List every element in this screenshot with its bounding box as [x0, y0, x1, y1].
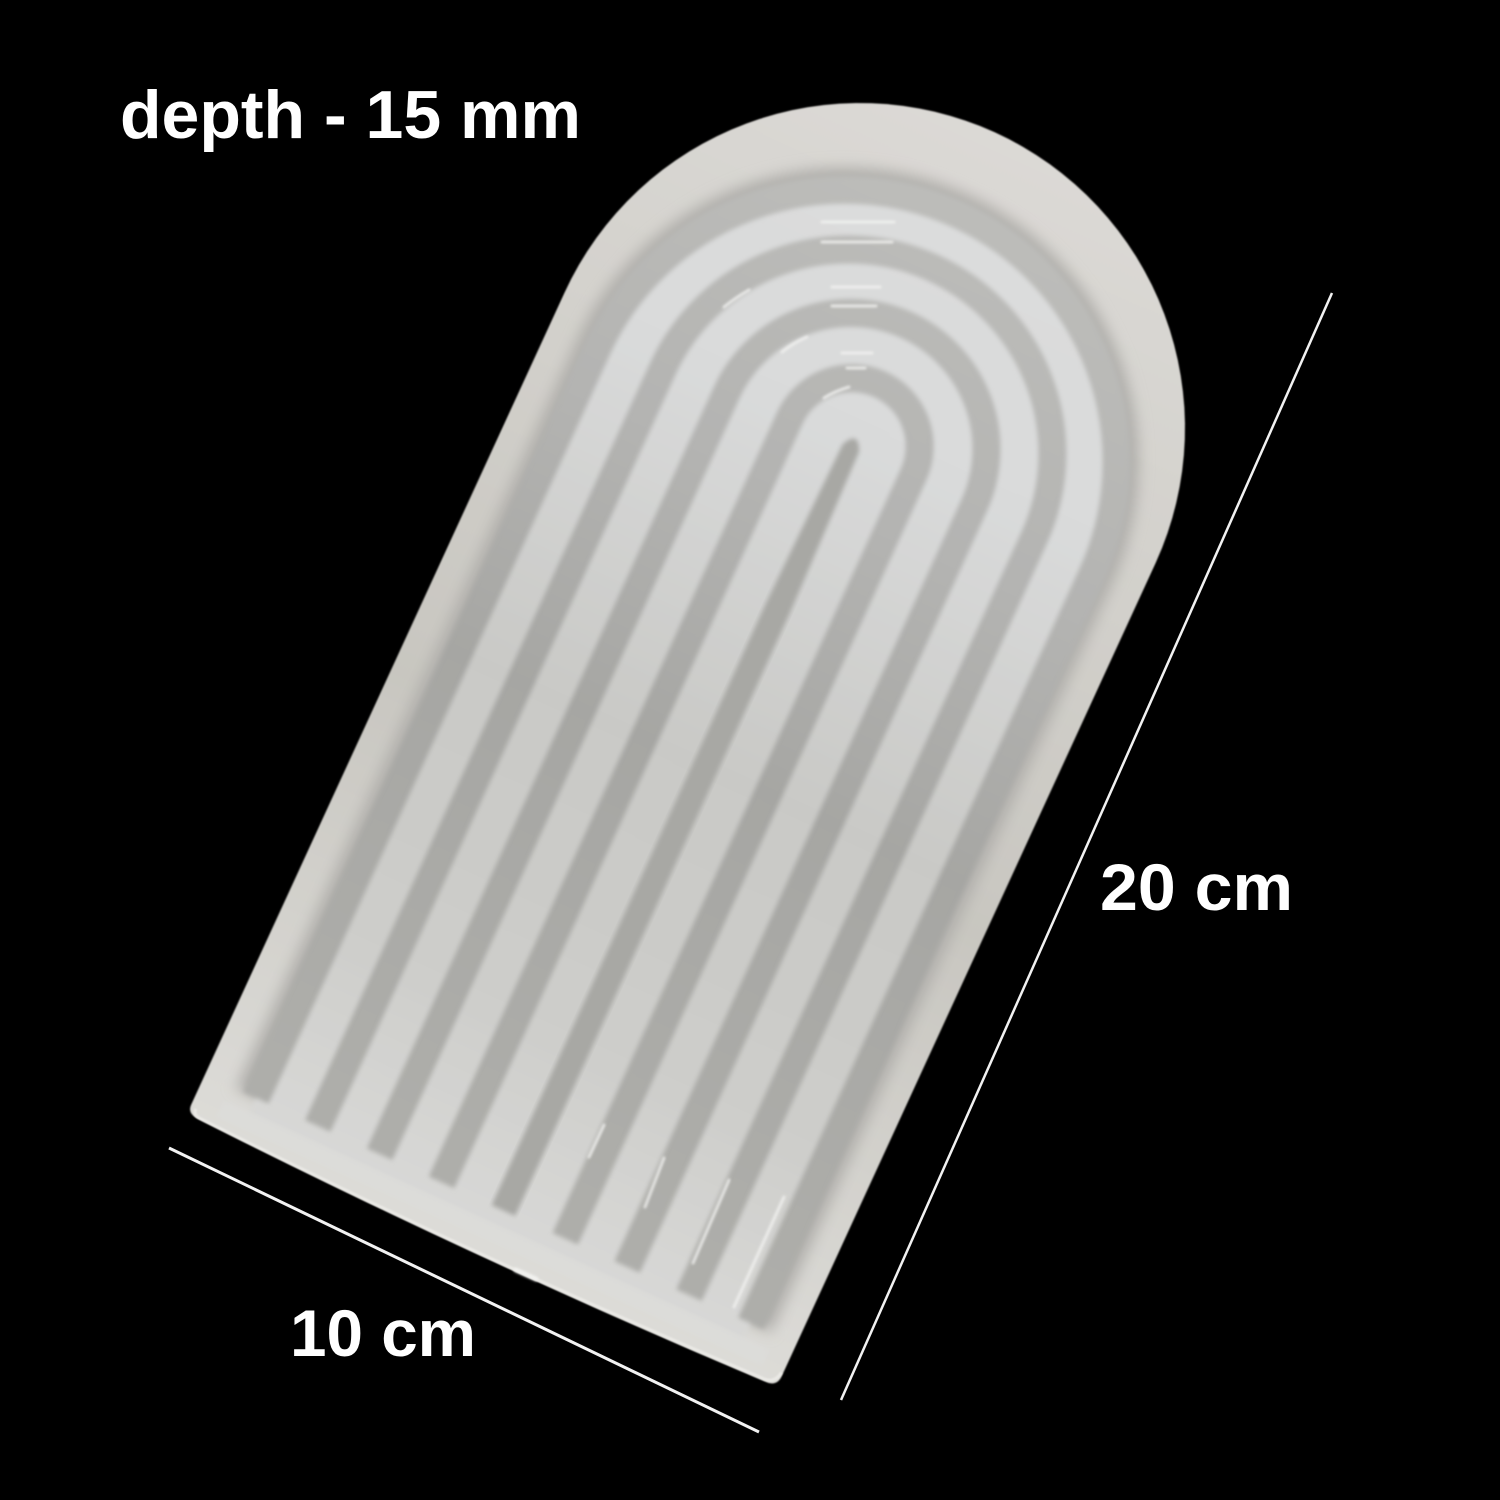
dimension line: width [169, 1148, 759, 1432]
label: width: 10 cm [290, 1296, 476, 1370]
bottom edge highlight [190, 1106, 781, 1388]
infographic canvas [122, 89, 1334, 1434]
silicone arch mold [189, 102, 1186, 1385]
dimension line: height [841, 293, 1332, 1400]
concentric grooves [244, 178, 1128, 1329]
mold outer rim [184, 0, 1291, 1391]
rim inner shadow and mold interior [234, 162, 1144, 1334]
tray interior [256, 202, 1104, 1327]
label: height: 20 cm [1100, 850, 1293, 924]
glossy highlights [516, 222, 894, 1307]
label: depth: depth - 15 mm [120, 77, 581, 153]
center groove [492, 434, 867, 1216]
bottom lip of tray [216, 1101, 770, 1366]
